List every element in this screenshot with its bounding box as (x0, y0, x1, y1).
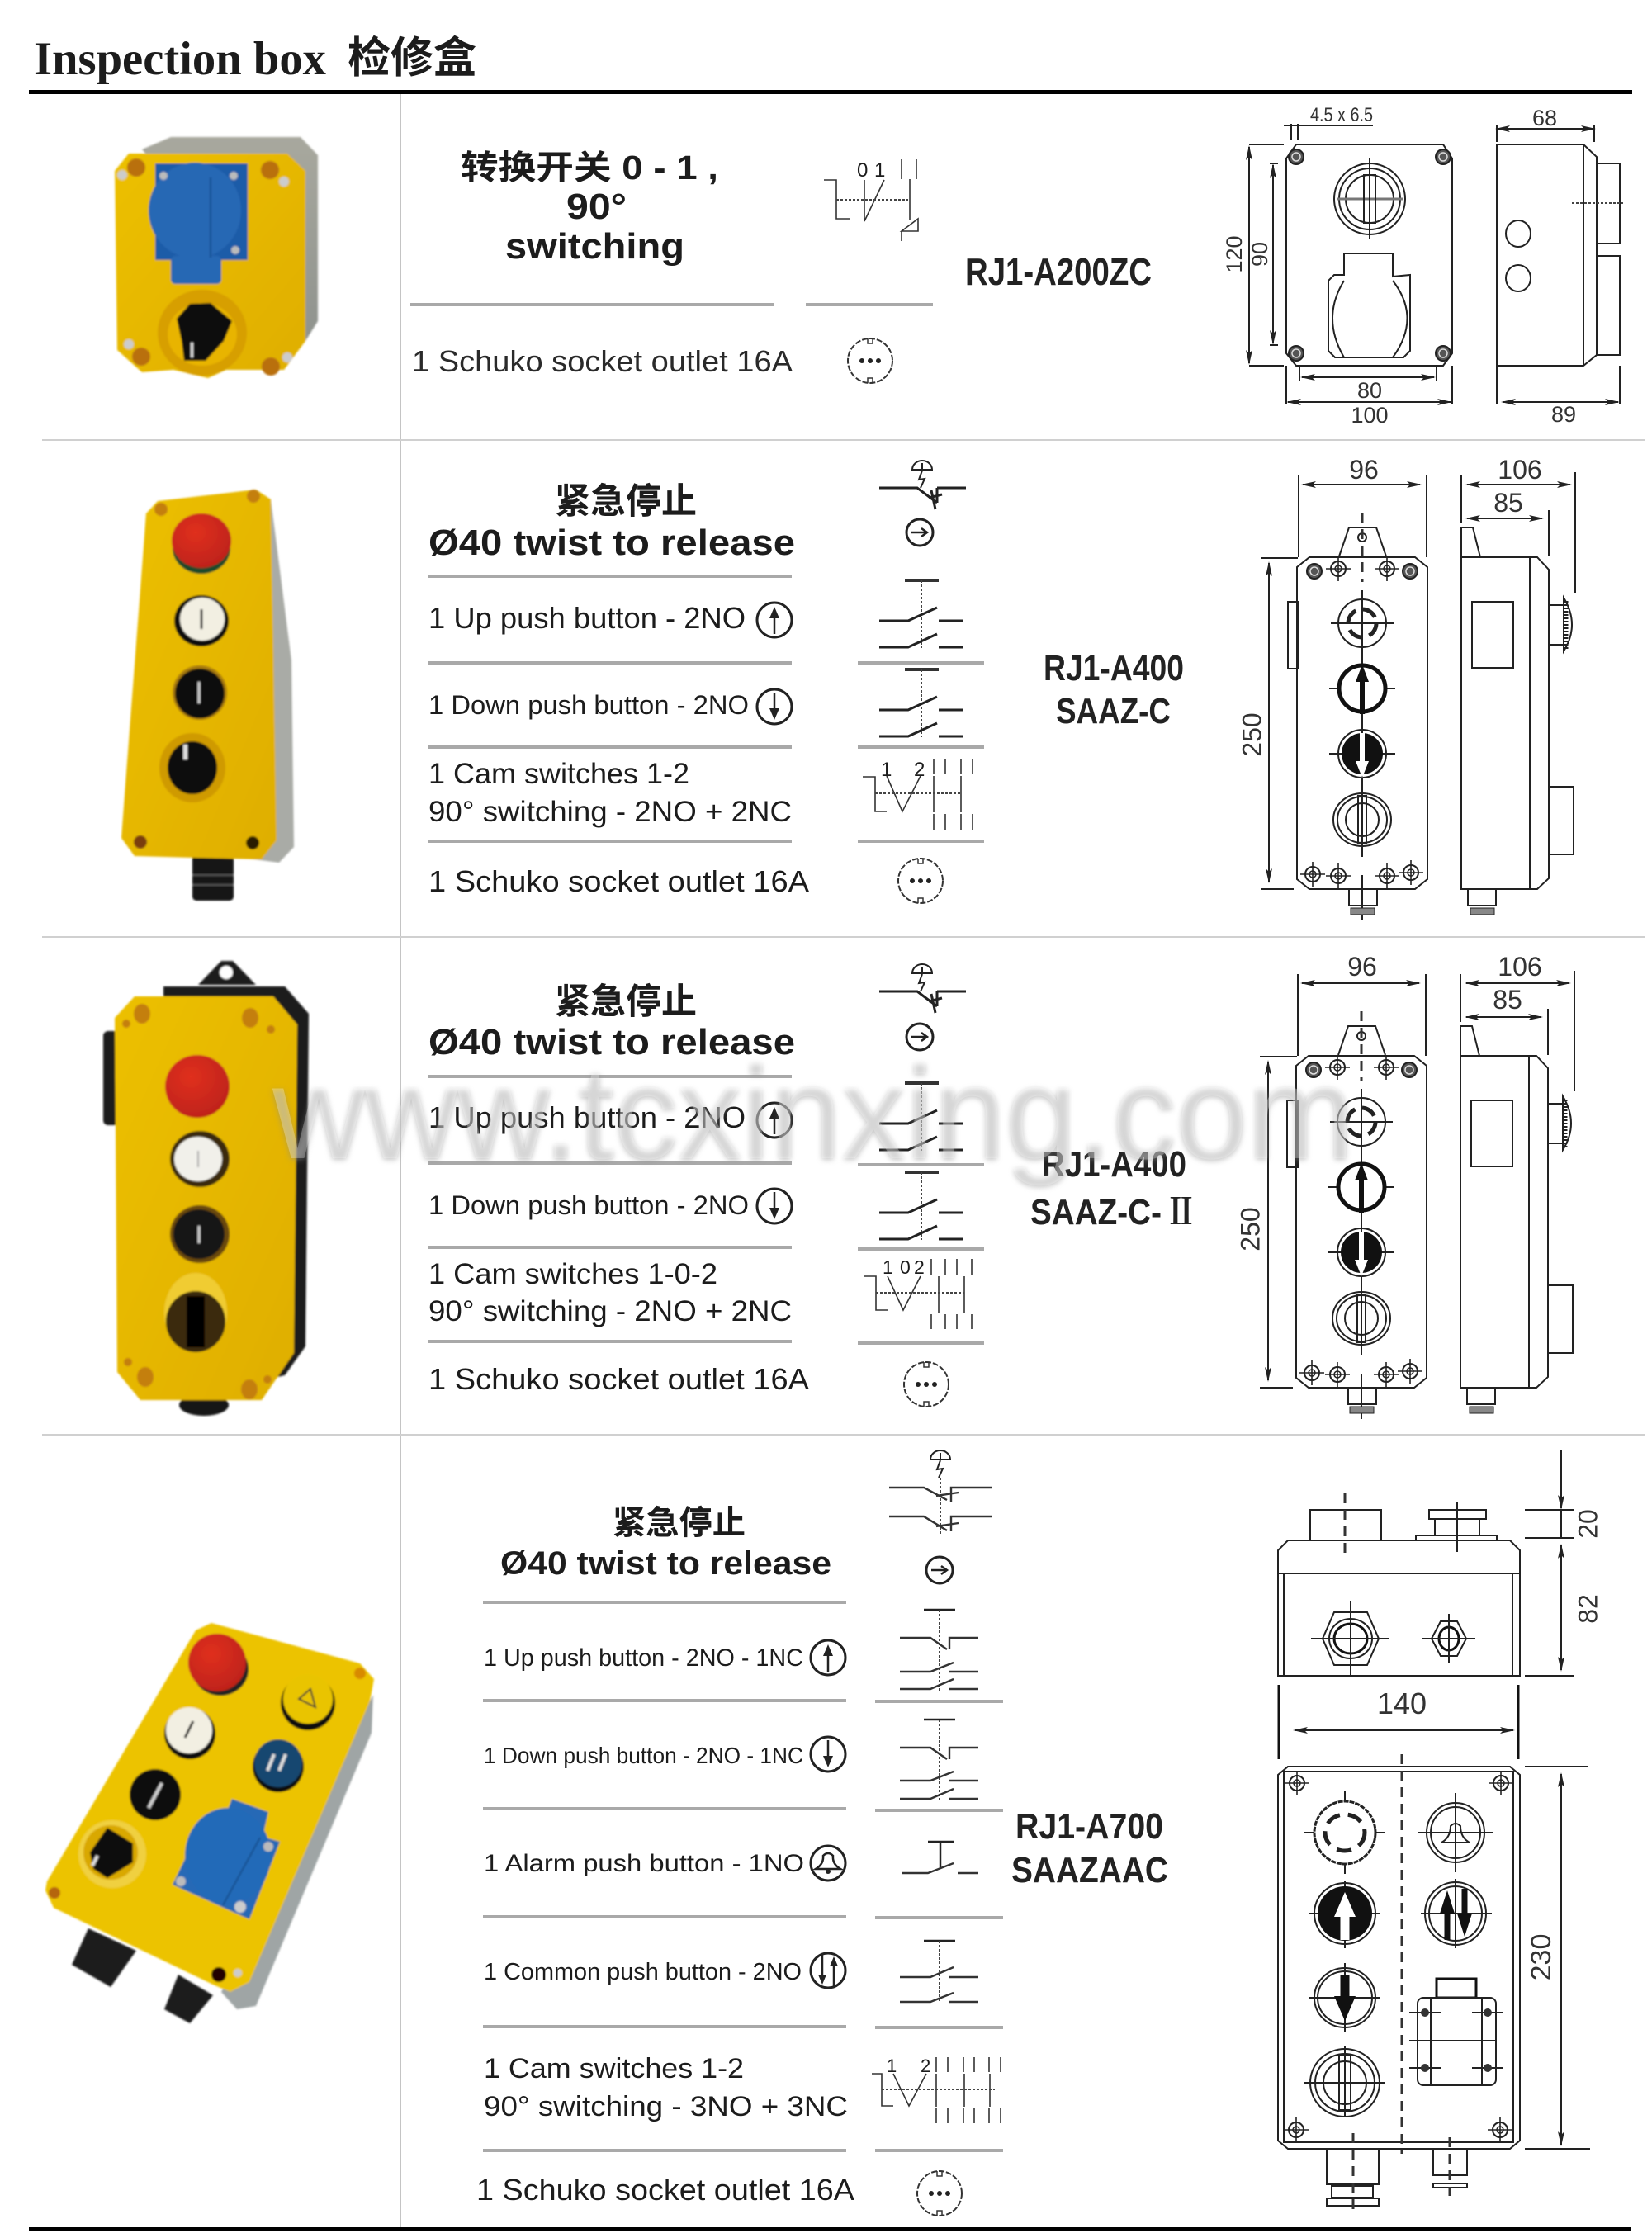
drawing: RJ1-A400 SAAZ-C dimensions: 106 (1498, 455, 1542, 485)
model number: RJ1-A400 (1042, 1144, 1186, 1185)
drawing: RJ1-A400 SAAZ-C-II dimensions (1235, 952, 1574, 1419)
drawing: RJ1-A700 dimensions: 20 (1573, 1509, 1602, 1539)
photo: RJ1-A400 SAAZ-C-II box (103, 961, 309, 1416)
spec list: 1 Up push button - 2NO (428, 601, 746, 635)
spec list: 90° switching - 2NO + 2NC (428, 1295, 792, 1327)
model number (1011, 1806, 1168, 1890)
drawing: RJ1-A200ZC dimensions: 80 (1357, 378, 1382, 403)
model number: Ⅱ (1166, 1192, 1196, 1232)
heading: emergency stop: Ø40 twist to release (500, 1545, 831, 1582)
model number: RJ1-A400 (1044, 648, 1184, 688)
heading: emergency stop (428, 982, 795, 1062)
spec list: 1 Down push button - 2NO (428, 1190, 749, 1220)
icon: up arrow (757, 1103, 792, 1138)
spec list: 1 Down push button - 2NO (428, 690, 749, 720)
watermark: www.tcxinxing.com (272, 1038, 1354, 1186)
symbol: cam switch 0-1: 0 (857, 159, 868, 182)
spec list: 1 Cam switches 1-2 (428, 758, 689, 790)
drawing: RJ1-A400 SAAZ-C-II dimensions: 96 (1347, 952, 1377, 982)
spec list: 1 Cam switches 1-0-2 (428, 1258, 717, 1290)
model number: SAAZ-C (1056, 691, 1171, 731)
icon: down arrow (757, 689, 792, 724)
spec list: 1 Alarm push button - 1NO (484, 1850, 804, 1877)
icon: up arrow (811, 1640, 845, 1675)
spec list: 1 Down push button - 2NO - 1NC (484, 1743, 803, 1768)
spec list (428, 601, 809, 898)
drawing: RJ1-A400 SAAZ-C-II dimensions: 106 (1498, 952, 1542, 982)
spec list (476, 1644, 854, 2207)
heading: emergency stop: Ø40 twist to release (428, 1022, 795, 1062)
heading: switch type: 转换开关 0 - 1 , (461, 149, 718, 187)
watermark: www.tcxinxing.com (272, 1040, 1354, 1188)
photo: RJ1-A400 SAAZ-C box (121, 490, 294, 901)
heading: emergency stop: 紧急停止 (555, 482, 697, 522)
model number: SAAZAAC (1011, 1850, 1168, 1890)
panel: RJ1-A400 SAAZ-C (121, 455, 1575, 920)
drawing: RJ1-A200ZC dimensions (1222, 104, 1623, 428)
drawing: RJ1-A200ZC dimensions: 4.5 x 6.5 (1310, 104, 1373, 126)
symbols: circuit (864, 964, 972, 1407)
model number: RJ1-A700 (1015, 1806, 1163, 1847)
panel: RJ1-A400 SAAZ-C-II (103, 952, 1574, 1419)
model number: RJ1-A200ZC (965, 250, 1152, 293)
drawing: RJ1-A400 SAAZ-C dimensions: 250 (1237, 712, 1266, 757)
symbols: circuit: 1 (881, 759, 892, 781)
spec list: 1 Cam switches 1-2 (484, 2053, 744, 2084)
drawing: RJ1-A700 dimensions: 140 (1377, 1687, 1427, 1720)
spec list: 90° switching - 3NO + 3NC (484, 2091, 848, 2122)
spec list: 1 Up push button - 2NO (428, 1100, 746, 1134)
drawing: RJ1-A400 SAAZ-C-II dimensions: 85 (1493, 985, 1522, 1015)
drawing: RJ1-A200ZC dimensions: 89 (1551, 402, 1576, 427)
symbols: circuit: 2 (921, 2056, 930, 2076)
spec list (428, 1100, 809, 1396)
title (34, 33, 476, 85)
title: 检修盒 (348, 35, 476, 83)
symbols: circuit: 2 (914, 759, 925, 781)
spec list: 90° switching - 2NO + 2NC (428, 796, 792, 828)
drawing: RJ1-A400 SAAZ-C dimensions: 85 (1493, 488, 1523, 518)
symbols: circuit: 0 (900, 1256, 911, 1278)
model number: SAAZ-C- (1030, 1192, 1162, 1232)
heading: emergency stop: 紧急停止 (613, 1505, 746, 1541)
heading: switch type (461, 149, 718, 267)
symbol: cam switch 0-1 (824, 159, 918, 241)
symbol: cam switch 0-1: 1 (874, 159, 885, 182)
spec list: 1 Common push button - 2NO (484, 1959, 802, 1985)
drawing: RJ1-A200ZC dimensions: 90 (1247, 242, 1272, 267)
icon: up arrow (757, 603, 792, 637)
spec list: 1 Schuko socket outlet 16A (476, 2173, 854, 2207)
spec list: 1 Schuko socket outlet 16A (428, 864, 809, 898)
heading: switch type: switching (505, 226, 684, 267)
spec list: 1 Up push button - 2NO - 1NC (484, 1644, 803, 1672)
symbol: socket (848, 338, 892, 383)
heading: emergency stop (500, 1505, 831, 1582)
symbols: circuit: 1 (883, 1256, 893, 1278)
drawing: RJ1-A700 dimensions: 230 (1526, 1934, 1557, 1980)
drawing: RJ1-A700 dimensions (1278, 1450, 1602, 2214)
heading: emergency stop (428, 482, 795, 563)
panel: RJ1-A700 SAAZAAC (45, 1450, 1602, 2216)
spec: socket outlet: 1 Schuko socket outlet 16A (412, 344, 793, 378)
heading: emergency stop: 紧急停止 (555, 982, 697, 1022)
model number (1030, 1144, 1196, 1232)
symbols: circuit (872, 1450, 1001, 2216)
icon: down arrow (757, 1189, 792, 1223)
heading: switch type: 90° (566, 187, 627, 227)
title: Inspection box (34, 33, 326, 85)
drawing: RJ1-A200ZC dimensions: 68 (1532, 106, 1557, 130)
symbols: circuit: 1 (887, 2056, 897, 2076)
drawing: RJ1-A200ZC dimensions: 120 (1222, 235, 1247, 273)
spec list: 1 Schuko socket outlet 16A (428, 1362, 809, 1396)
icon: alarm bell (811, 1846, 845, 1881)
icon: common up-down arrows (811, 1953, 845, 1988)
icon: down arrow (811, 1737, 845, 1772)
drawing: RJ1-A400 SAAZ-C dimensions: 96 (1349, 455, 1379, 485)
drawing: RJ1-A400 SAAZ-C-II dimensions: 250 (1235, 1207, 1265, 1251)
drawing: RJ1-A200ZC dimensions: 100 (1351, 403, 1389, 428)
symbols: circuit (863, 461, 973, 903)
panel: RJ1-A200ZC (115, 104, 1623, 428)
model number (1044, 648, 1184, 731)
heading: emergency stop: Ø40 twist to release (428, 523, 795, 563)
photo: RJ1-A200ZC box (115, 137, 318, 378)
drawing: RJ1-A700 dimensions: 82 (1573, 1594, 1602, 1624)
drawing: RJ1-A400 SAAZ-C dimensions (1237, 455, 1575, 920)
photo: RJ1-A700 SAAZAAC box (45, 1623, 374, 2023)
symbols: circuit: 2 (914, 1256, 925, 1278)
